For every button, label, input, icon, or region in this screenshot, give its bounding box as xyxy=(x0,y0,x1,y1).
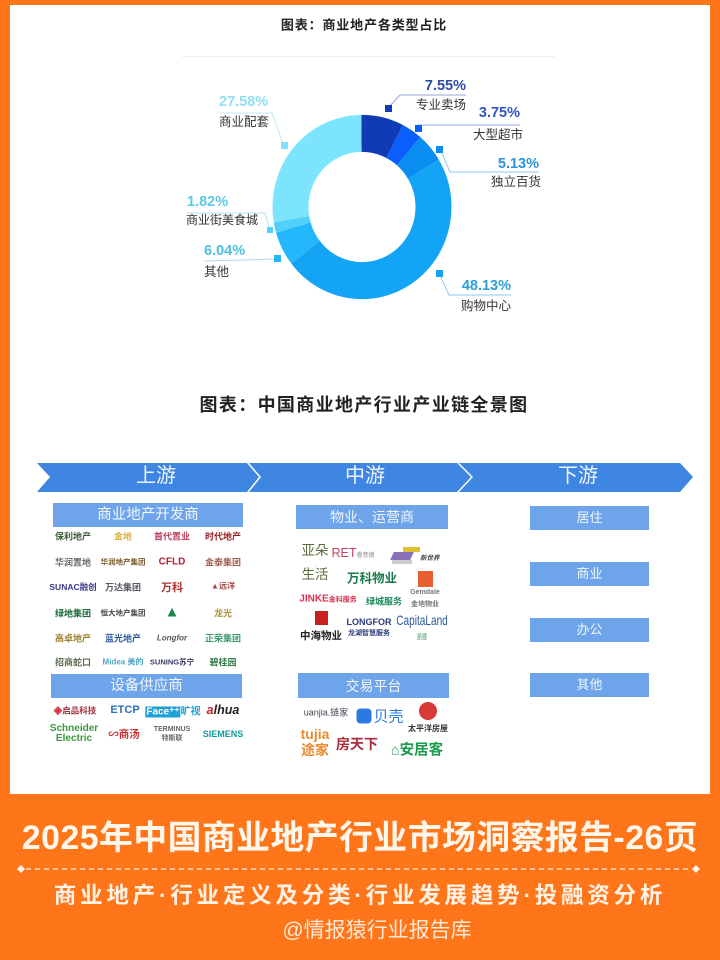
logo: CapitaLand: CapitaLand xyxy=(396,612,448,628)
logo: 华润置地: 华润置地 xyxy=(55,558,91,568)
label: 商业街美食城: 商业街美食城 xyxy=(186,213,258,227)
logo: 安居客: ⌂安居客 xyxy=(391,742,443,758)
logo: CapitaLand xyxy=(396,612,448,641)
logo: 亚朵生活: 亚朵 xyxy=(302,543,328,558)
logo: 万科: 万科 xyxy=(161,582,183,594)
logo: 首代置业: 首代置业 xyxy=(154,532,190,542)
logo: 时代地产: 时代地产 xyxy=(205,532,241,542)
logo: tujia 途家: tujia xyxy=(301,726,329,742)
logo: 金泰集团: 金泰集团 xyxy=(205,558,241,568)
logo: RET: RET睿意德 xyxy=(331,546,375,560)
logo: Schneider Electric xyxy=(50,723,98,744)
label: 商业配套: 商业配套 xyxy=(219,115,269,129)
label: 27.58%: 27.58% xyxy=(219,94,268,110)
logo: 龙光: 龙光 xyxy=(214,608,232,618)
logo: tujia 途家 xyxy=(300,726,330,758)
logo: 绿城服务: 绿城服务 xyxy=(366,596,402,606)
logo: Schneider Electric: Schneider xyxy=(50,723,98,734)
logo grid: property operators xyxy=(299,543,448,642)
section header: 商业地产开发商: 商业地产开发商 xyxy=(97,507,199,523)
panel: donut chart with callouts xyxy=(182,56,555,300)
heading: industry chain title: 图表：中国商业地产行业产业链全景图 xyxy=(200,395,528,415)
logo grid: trading platforms xyxy=(300,702,448,758)
logo: 碧桂园: 碧桂园 xyxy=(209,658,237,668)
label: 5.13%: 5.13% xyxy=(498,156,539,172)
downstream box: 商业 xyxy=(530,562,649,586)
logo: alhua: alhua xyxy=(207,703,239,717)
logo: TERMINUS: TERMINUS xyxy=(154,726,190,733)
section header: 设备供应商 xyxy=(51,674,242,698)
panel: white content area xyxy=(10,5,710,794)
logo: triangle: ▲ xyxy=(165,604,179,620)
logo: 新世界 xyxy=(390,547,440,564)
downstream box: 办公: 办公 xyxy=(576,622,602,637)
logo: mountain: ▲远洋 xyxy=(211,582,235,590)
logo: 华润地产集团: 华润地产集团 xyxy=(100,558,146,566)
logo: Face++ 旷视: Face⁺⁺旷视 xyxy=(146,706,201,718)
logo: 恒大地产集团: 恒大地产集团 xyxy=(100,608,146,618)
logo: JINKE: JINKE金科服务 xyxy=(299,594,357,604)
stage label: 下游: 下游 xyxy=(558,465,598,487)
downstream box: 其他: 其他 xyxy=(576,677,602,692)
logo: 金地: 金地 xyxy=(114,532,132,542)
logo: LONGFOR: LONGFOR xyxy=(346,617,392,627)
subtitle: 商业地产·行业定义及分类·行业发展趋势·投融资分析 xyxy=(54,883,666,908)
logo: 蓝光地产: 蓝光地产 xyxy=(105,634,141,644)
logo: 中海物业: 中海物业 xyxy=(300,630,342,642)
logo: Midea: Midea 美的 xyxy=(103,658,143,666)
logo: 中海物业 xyxy=(300,611,342,642)
logo: 贝壳 xyxy=(356,708,404,726)
source handle: @情报猿行业报告库 xyxy=(282,919,472,942)
logo: 新世界: 新世界 xyxy=(420,555,440,562)
section header: 商业地产开发商 xyxy=(53,503,243,527)
logo: SIEMENS: SIEMENS xyxy=(203,729,243,739)
logo: 亚朵生活 xyxy=(302,543,328,582)
downstream box: 居住: 居住 xyxy=(576,510,602,525)
logo: LONGFOR xyxy=(346,617,392,637)
label: 大型超市: 大型超市 xyxy=(473,128,523,142)
logo: 万科物业: 万科物业 xyxy=(347,572,397,586)
dashed divider with diamonds xyxy=(17,865,700,873)
logo: Schneider Electric: Electric xyxy=(56,733,92,744)
label: 6.04%: 6.04% xyxy=(204,243,245,259)
downstream box: 居住 xyxy=(530,506,649,530)
main title: 2025年中国商业地产行业市场洞察报告-26页 xyxy=(22,819,698,857)
logo: 太平洋房屋: 太平洋房屋 xyxy=(408,724,448,733)
logo: Gemdale: 金地物业 xyxy=(411,601,439,608)
section header: 交易平台 xyxy=(298,673,449,698)
logo grid: equipment suppliers xyxy=(50,703,243,744)
logo: 商汤: ∽商汤 xyxy=(108,728,140,740)
arrow banner: upstream, midstream, downstream xyxy=(37,463,693,492)
logo: tujia 途家: 途家 xyxy=(301,742,329,758)
label: 购物中心: 购物中心 xyxy=(461,299,511,313)
logo: 金地物业 red square xyxy=(418,571,433,587)
logo: 启品: ◈启品科技 xyxy=(54,704,96,716)
logo: 招商蛇口: 招商蛇口 xyxy=(55,658,91,668)
logo: 正荣集团: 正荣集团 xyxy=(205,634,241,644)
logo: 高卓地产: 高卓地产 xyxy=(55,634,91,644)
logo: TERMINUS: 特斯联 xyxy=(162,735,182,742)
label: 7.55%: 7.55% xyxy=(425,78,466,94)
section header: 物业、运营商: 物业、运营商 xyxy=(330,509,414,525)
logo: Longfor: Longfor xyxy=(157,634,187,642)
downstream box: 办公 xyxy=(530,618,649,642)
label: 其他: 其他 xyxy=(204,265,229,279)
downstream box: 其他 xyxy=(530,673,649,697)
section header: 设备供应商: 设备供应商 xyxy=(110,678,183,694)
logo: TERMINUS xyxy=(154,726,190,742)
downstream box: 商业: 商业 xyxy=(576,566,602,581)
logo: ETCP: ETCP xyxy=(110,704,140,716)
logo: SUNAC: SUNAC融创 xyxy=(49,582,97,592)
section header: 物业、运营商 xyxy=(296,505,448,529)
logo: SUNING: SUNING苏宁 xyxy=(150,658,194,666)
heading: pie chart title: 图表：商业地产各类型占比 xyxy=(281,18,447,32)
logo: 绿地集团: 绿地集团 xyxy=(55,608,91,618)
section header: 交易平台: 交易平台 xyxy=(346,678,402,694)
label: 1.82%: 1.82% xyxy=(187,194,228,210)
label: 3.75%: 3.75% xyxy=(479,105,520,121)
label: 独立百货: 独立百货 xyxy=(491,175,541,189)
logo: 保利地产: 保利地产 xyxy=(55,532,91,542)
callout lines and markers xyxy=(187,95,539,295)
logo: Gemdale: Gemdale xyxy=(410,589,440,596)
logo: 太平洋房屋 xyxy=(408,702,448,733)
logo: CapitaLand: 凯德 xyxy=(417,634,427,641)
stage label: 上游: 上游 xyxy=(136,465,176,487)
logo: 亚朵生活: 生活 xyxy=(302,567,328,582)
chart: donut segments xyxy=(290,133,434,281)
logo: 万达集团: 万达集团 xyxy=(105,582,141,592)
logo: LONGFOR: 龙湖智慧服务 xyxy=(348,630,390,637)
label: 专业卖场: 专业卖场 xyxy=(416,98,466,112)
logo: 贝壳: 贝壳 xyxy=(373,708,404,726)
logo: uanjia 链家: uanjia.链家 xyxy=(304,708,348,718)
logo grid: developers xyxy=(49,532,241,668)
logo: Gemdale xyxy=(410,589,440,608)
label: 48.13%: 48.13% xyxy=(462,278,511,294)
stage label: 中游: 中游 xyxy=(345,465,385,487)
logo: 房天下: 房天下 xyxy=(336,736,378,752)
logo: CFLD: CFLD xyxy=(159,556,185,568)
